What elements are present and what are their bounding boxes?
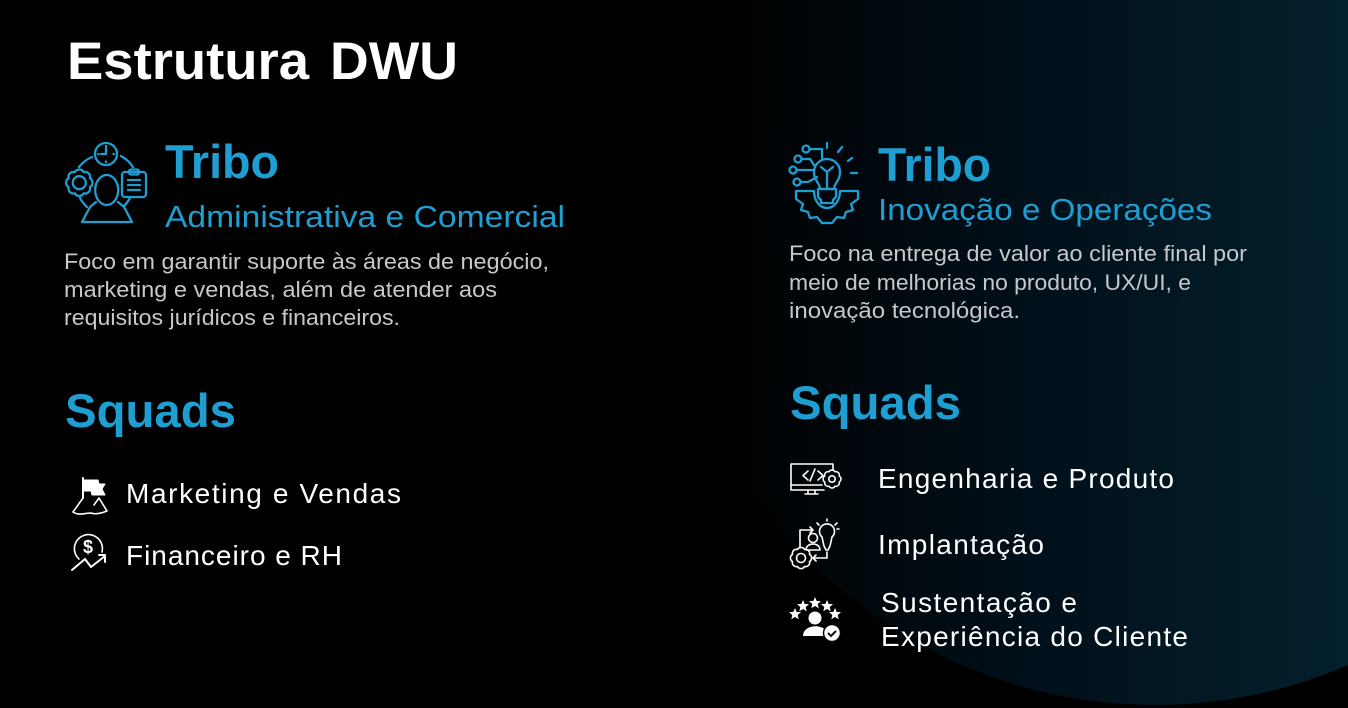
panel: tribo inovacao e operacoes: [789, 138, 1247, 652]
label: sustentacao e experiencia do cliente: [881, 587, 1188, 652]
subheading: Inovação e Operações: [878, 192, 1212, 227]
description: marketing e vendas, além de atender aos: [64, 277, 497, 302]
description: [789, 241, 1247, 323]
icon: light bulb with circuit and gear: [790, 143, 858, 223]
label: implantacao: Implantação: [878, 529, 1044, 560]
icon: process with person, bulb and gear: [790, 519, 839, 569]
background circle: [669, 0, 1348, 705]
label: engenharia e produto: Engenharia e Produto: [878, 463, 1174, 494]
heading: squads: Squads: [65, 384, 236, 437]
label: financeiro e rh: Financeiro e RH: [126, 540, 342, 571]
panel: tribo administrativa e comercial: [64, 135, 565, 571]
title: [67, 32, 458, 91]
icon: dollar with rising arrow: [72, 535, 105, 570]
description: Foco na entrega de valor ao cliente final por: [789, 241, 1247, 266]
icon: monitor with code and gear: [791, 464, 841, 494]
icon: flag on mountain: [73, 478, 107, 514]
title: Estrutura: [67, 32, 310, 91]
description: inovação tecnológica.: [789, 298, 1020, 323]
heading: tribo: Tribo: [165, 135, 279, 188]
label: sustentacao e experiencia do cliente: Experiência do Cliente: [881, 621, 1188, 652]
label: sustentacao e experiencia do cliente: Sustentação e: [881, 587, 1077, 618]
label: marketing e vendas: Marketing e Vendas: [126, 478, 401, 509]
subheading: Administrativa e Comercial: [165, 199, 565, 234]
description: meio de melhorias no produto, UX/UI, e: [789, 270, 1191, 295]
icon: person with stars and check: [789, 597, 841, 642]
title: DWU: [330, 32, 458, 91]
icon: dollar with rising arrow: $: [83, 537, 93, 557]
description: Foco em garantir suporte às áreas de negócio,: [64, 249, 549, 274]
heading: tribo: Tribo: [878, 138, 991, 191]
description: requisitos jurídicos e financeiros.: [64, 305, 400, 330]
icon: person with clock, gear and clipboard: [66, 143, 146, 222]
heading: squads: Squads: [790, 376, 961, 429]
description: [64, 249, 549, 330]
